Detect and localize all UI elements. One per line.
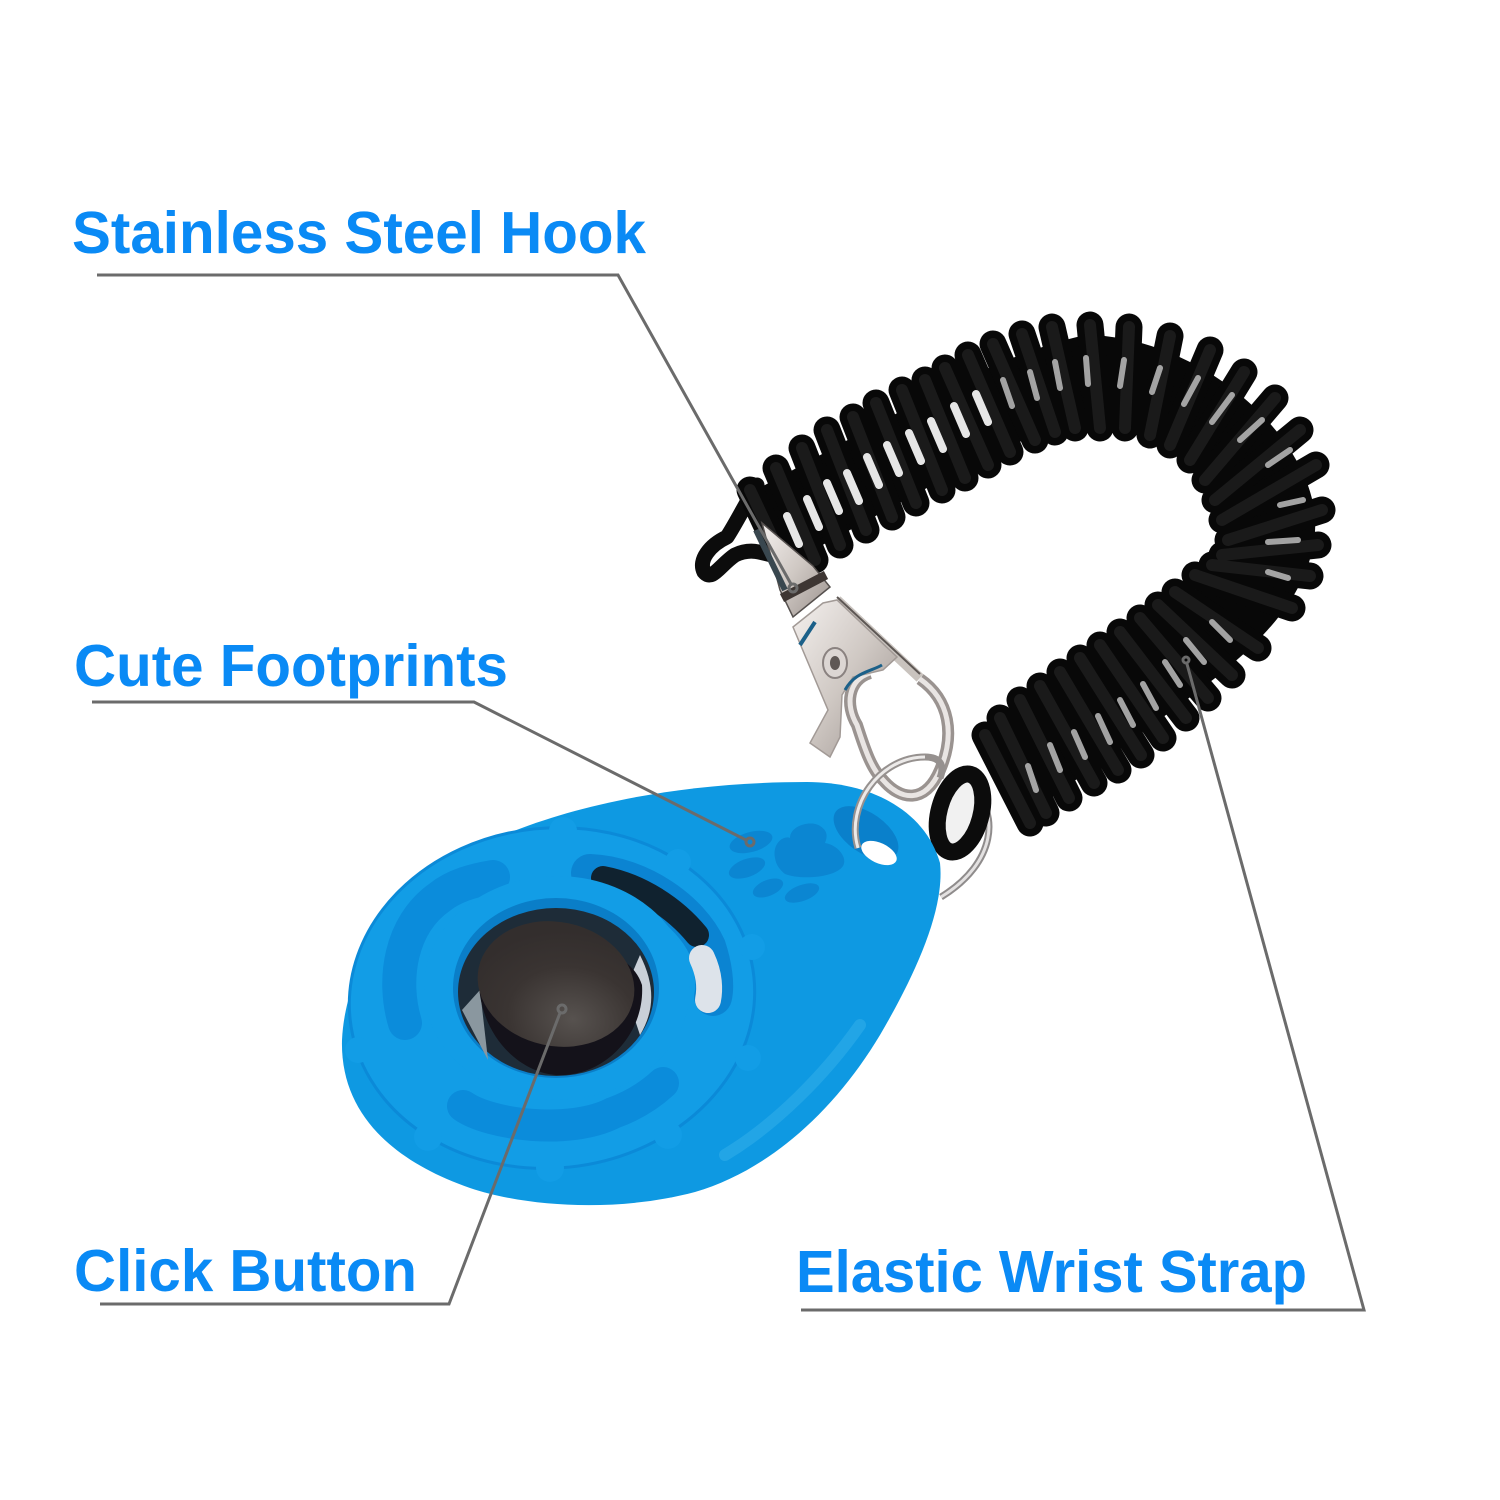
label: Elastic Wrist Strap: Elastic Wrist Strap [796,1239,1307,1305]
gate loop [850,673,948,796]
icon: stainless steel hook [756,523,948,796]
label: Cute Footprints: Cute Footprints [74,633,508,699]
icon: elastic coil wrist strap [702,325,1322,897]
leader line: Cute Footprints [92,702,754,846]
clip hole [824,795,908,871]
strap end loop [929,769,991,857]
snap tip [762,523,830,617]
gear ring [332,808,772,1188]
inner ring [424,876,690,1100]
label: Click Button: Click Button [74,1238,417,1304]
plate [793,600,897,757]
icon: teardrop clicker body [332,757,942,1205]
glossy edge [725,1025,860,1155]
end loop tube, upper left [702,485,775,575]
rear split ring [941,790,989,897]
recess: bottom [463,1083,663,1126]
leader line: Elastic Wrist Strap [801,657,1364,1310]
ring bumps [345,817,765,1182]
paw print [726,823,844,907]
gate bar [837,600,920,678]
button [479,944,642,1075]
window: right [590,873,714,1000]
coil highlights [787,394,988,544]
hole interior [458,908,654,1076]
leader line: Click Button [100,1005,566,1304]
split ring [855,757,942,848]
label: Stainless Steel Hook: Stainless Steel Hook [72,200,646,266]
rivet [823,648,847,678]
leader line: Stainless Steel Hook [97,275,797,592]
coil solid underlay [775,375,1275,778]
recess: left [399,877,493,1023]
